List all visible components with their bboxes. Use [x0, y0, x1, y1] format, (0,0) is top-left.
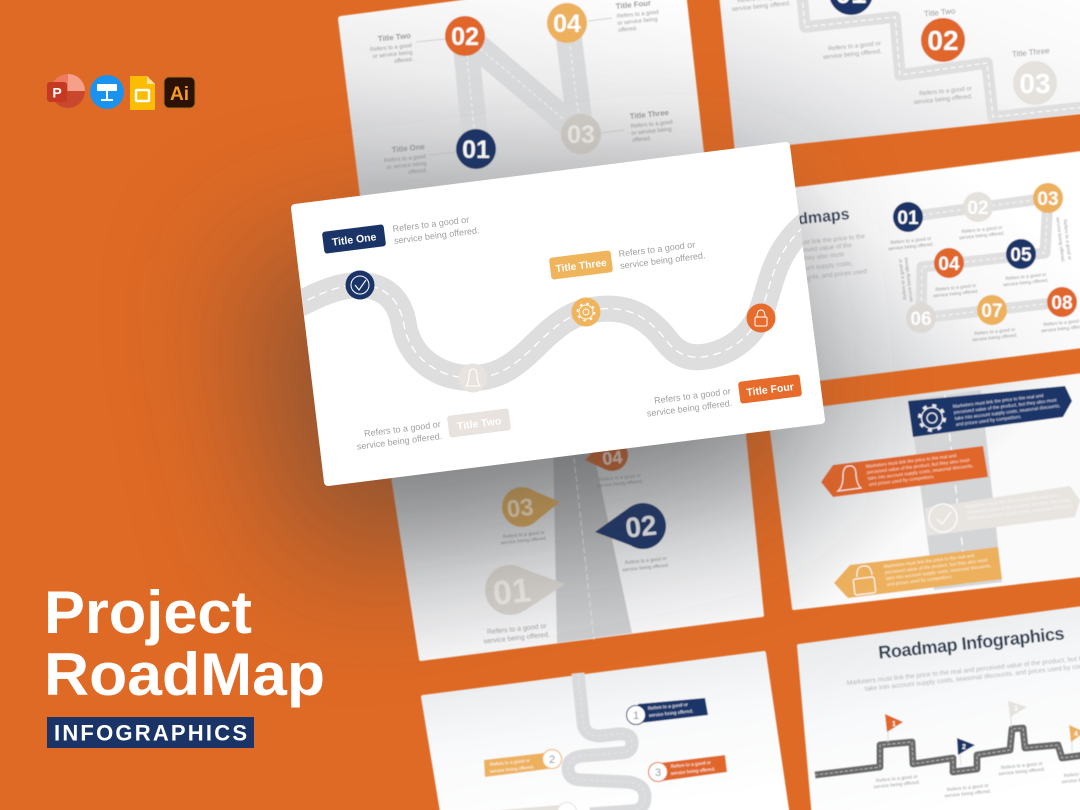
caption 2: service being offered. — [823, 48, 882, 61]
step 08 — [1047, 287, 1077, 317]
step 07: 07 — [981, 301, 1003, 322]
step 01 — [893, 202, 923, 232]
step captions: service being offered. — [1054, 217, 1066, 263]
flag captions: Refers to a good or — [1001, 761, 1043, 771]
paragraph: they also must — [802, 251, 844, 262]
label: Title One: Title One — [391, 142, 426, 154]
badge: Title Four — [738, 374, 802, 404]
road: vertical — [909, 390, 1002, 590]
banner text: take into account supply costs, seasonal discounts, — [886, 563, 992, 581]
banner text: and prices used by competitors. — [869, 474, 935, 487]
slide: staircase roadmap — [719, 0, 1080, 148]
banner: gear — [908, 386, 1072, 437]
icon row: app logos — [47, 74, 195, 110]
label: Title One: offered. — [408, 168, 428, 176]
badge: Title Four: Title Four — [746, 381, 795, 399]
connector lines — [416, 18, 624, 155]
banner text: perceived value of the product, but they also must — [954, 397, 1057, 415]
banner text: Marketers must link the price to the real and — [884, 553, 975, 569]
label: Title Four — [615, 0, 660, 34]
banner text: take into account supply costs, seasonal discounts, — [868, 463, 974, 481]
slide: Roadmap Infographics flags — [799, 607, 1080, 810]
heading: Roadmaps — [767, 206, 851, 232]
marker captions — [500, 473, 669, 573]
icon: Illustrator — [164, 77, 195, 108]
marker 01: 01 — [491, 571, 533, 613]
step 06: 06 — [910, 309, 932, 330]
text: Title Three description — [618, 238, 706, 271]
label: Title One: Refers to a good — [384, 154, 426, 164]
badge: Title Three: Title Three — [555, 258, 608, 275]
slide: vertical road with arrow banners — [770, 374, 1080, 608]
label: Title One — [382, 142, 428, 178]
text: Title One description — [392, 213, 480, 246]
step 02 — [963, 192, 993, 222]
text: Title Four description — [645, 386, 733, 419]
caption 3 — [913, 85, 973, 106]
marker 04: 04 — [601, 447, 623, 469]
badge: Title Two — [447, 408, 511, 438]
flag captions: service being offered. — [873, 780, 920, 790]
title: RoadMap — [44, 641, 325, 708]
label 2: 2 — [549, 754, 555, 766]
banner text — [884, 553, 992, 587]
marker captions: service being offered. — [596, 479, 643, 489]
step 04: 04 — [938, 254, 960, 275]
label: Title Two — [368, 31, 414, 67]
label 1: Refers to a good or — [648, 702, 688, 711]
step 02: 02 — [967, 198, 989, 219]
step 03: 03 — [1019, 68, 1051, 99]
slide: teardrop markers — [392, 425, 762, 659]
step 06 — [906, 303, 936, 333]
flag captions: service being offered. — [944, 789, 991, 799]
paragraph — [789, 233, 868, 285]
caption 3: service being offered. — [914, 93, 973, 106]
slide: Roadmaps eight steps — [767, 152, 1080, 379]
label: Title Three: Title Three — [629, 108, 670, 121]
icon: bell marker — [458, 364, 488, 392]
flag 3: 3 — [1014, 706, 1018, 713]
banner text — [866, 453, 974, 487]
marker captions: service being offered. — [500, 536, 547, 546]
label: Title Two: or service being — [372, 50, 413, 60]
main card shadow — [235, 195, 790, 570]
label: Title Four: or service being — [617, 17, 658, 27]
step 03: 03 — [567, 121, 595, 149]
banner: bell — [821, 446, 988, 497]
label: Title Three: or service being — [631, 127, 672, 137]
icon: gear — [920, 406, 944, 430]
step 02 — [921, 18, 965, 62]
flag 3 — [1008, 701, 1027, 727]
step captions: Refers to a good or — [897, 258, 908, 300]
label 2: service being offered. — [490, 764, 535, 774]
label 1 — [626, 698, 708, 724]
title: Project — [44, 579, 252, 646]
label 1: 1 — [633, 710, 639, 722]
banner text: take into account supply costs, seasonal discounts, — [955, 403, 1061, 421]
marker 02 — [595, 503, 666, 549]
caption 01 — [483, 623, 550, 645]
step 03 — [561, 114, 601, 154]
step 01: 01 — [897, 208, 919, 229]
label 2: Refers to a good or — [490, 758, 530, 767]
text: Title Three description: service being offered. — [620, 250, 706, 271]
step 08: 08 — [1051, 293, 1073, 314]
banner text: perceived value of the product, but they also must — [885, 557, 988, 575]
label 2 — [484, 750, 562, 777]
step captions: Refers to a good or — [974, 327, 1016, 337]
label 3: Refers to a good or — [671, 760, 711, 769]
icon: bell — [838, 466, 861, 491]
badge: Title One: Title One — [331, 231, 377, 249]
text: Title Two description: service being offered. — [356, 431, 443, 452]
banner text: perceived value of the product, but they also must — [867, 457, 970, 475]
text: Title Two description: Refers to a good or — [364, 419, 441, 439]
icon: lock marker — [746, 304, 776, 332]
marker 01 — [485, 565, 565, 615]
text: Title Three description: Refers to a good or — [618, 239, 696, 259]
banner text: Marketers must link the price to the real and — [966, 493, 1057, 509]
flag 1 — [885, 714, 903, 742]
flag captions: Refers to a good or — [876, 774, 918, 784]
label: Title One: or service being — [386, 161, 427, 171]
step 03: 03 — [1037, 189, 1059, 210]
icon: check marker — [346, 270, 374, 300]
label: Title Three: Title Three — [1011, 46, 1051, 59]
caption 3: Refers to a good or — [919, 85, 972, 98]
road: serpentine — [908, 198, 1062, 318]
slide: winding road — [423, 653, 790, 810]
icon: gear marker — [572, 298, 600, 326]
marker 03 — [502, 487, 560, 527]
label: Title Two: offered. — [394, 57, 414, 65]
banner text: perceived value of the product, but they also must — [967, 497, 1070, 515]
step 02 — [445, 16, 485, 56]
step captions: service being offered. — [903, 256, 915, 302]
label: Title Three: Refers to a good — [631, 120, 673, 130]
step captions: Refers to a good or — [935, 283, 977, 293]
banner text: and prices used by competitors. — [956, 414, 1022, 427]
road: staircase — [802, 0, 1080, 117]
flag 4: 4 — [1074, 731, 1078, 738]
marker captions: service being offered. — [622, 563, 669, 573]
caption 01: service being offered. — [483, 632, 550, 645]
badge: Title One — [322, 224, 386, 254]
icon: check — [929, 504, 957, 532]
icon: PowerPoint: P — [52, 84, 62, 100]
label: Title Two: Refers to a good — [370, 43, 412, 53]
label: Title Two: Title Two — [924, 6, 956, 19]
step 01: 01 — [462, 136, 490, 164]
step captions — [888, 217, 1080, 343]
badge: Title Three — [549, 250, 613, 280]
step 01 — [829, 0, 873, 15]
heading: Roadmap Infographics — [877, 623, 1065, 663]
step captions: service being offered. — [959, 231, 1005, 241]
step 02: 02 — [451, 23, 479, 51]
caption 2: Refers to a good or — [828, 40, 881, 53]
flag captions — [873, 761, 1080, 799]
icon: Google Slides — [130, 76, 155, 110]
banner text: Marketers must link the price to the real and — [866, 453, 957, 469]
flag captions: service being offered. — [998, 767, 1045, 777]
step captions: service being offered. — [933, 289, 979, 299]
flag 2 — [957, 738, 975, 765]
slide: N-shaped roadmap — [341, 0, 701, 196]
step 03 — [1033, 183, 1063, 213]
step 02: 02 — [927, 25, 959, 56]
caption 01: Refers to a good or — [487, 623, 548, 636]
text: Title One description: Refers to a good or — [392, 214, 470, 234]
icon: lock — [853, 566, 876, 595]
banner text — [966, 493, 1074, 521]
road: winding — [568, 673, 645, 810]
paragraph: perceived value of the — [789, 242, 853, 256]
panel: main road card — [295, 146, 821, 482]
step captions: Refers to a good or — [961, 225, 1003, 235]
label: Title Four: offered. — [618, 26, 638, 34]
banner: lock — [834, 547, 1002, 598]
text: Title Two description — [355, 419, 443, 452]
flag 2: 2 — [962, 744, 966, 751]
banner: check — [925, 486, 1080, 536]
road: winding main — [296, 220, 812, 378]
marker 02: 02 — [624, 510, 658, 544]
road: N shape — [465, 23, 581, 149]
title — [44, 579, 325, 708]
road: stepped — [815, 728, 1080, 775]
label 3: service being offered. — [671, 766, 716, 776]
icon: Illustrator: Ai — [170, 84, 189, 105]
icon: Keynote — [90, 75, 124, 109]
flag 4 — [1069, 725, 1080, 752]
banner text — [953, 393, 1061, 427]
banner text: Marketers must link the price to the real and — [953, 393, 1044, 409]
badge: Title Two: Title Two — [456, 415, 502, 433]
step captions: service being offered. — [888, 242, 934, 252]
flag captions: Refers to a good or — [947, 783, 989, 793]
text: Title Four description: Refers to a good or — [654, 386, 731, 406]
caption 1: service being offered. — [732, 0, 791, 13]
icon: PowerPoint — [47, 74, 85, 108]
banner text: take into account supply costs, seasonal discounts, — [968, 503, 1074, 521]
step captions: Refers to a good or — [1005, 272, 1047, 282]
label: Title Four: Refers to a good — [617, 10, 659, 20]
road: straight — [553, 436, 632, 643]
step 04: 04 — [553, 10, 581, 38]
step 04 — [934, 248, 964, 278]
paragraph: rs. — [804, 277, 812, 285]
paragraph: account supply costs, — [792, 260, 853, 273]
label: Title Three: offered. — [632, 136, 652, 144]
text: Title One description: service being offered. — [394, 225, 480, 246]
banner text: and prices used by competitors. — [887, 574, 953, 587]
text: Title Four description: service being offered. — [646, 398, 733, 419]
paragraph: must link the price to the — [796, 233, 866, 247]
marker 04 — [585, 439, 628, 471]
label: Title Two: Title Two — [377, 31, 411, 43]
label 3: 3 — [655, 767, 661, 779]
step captions: service being offered. — [972, 333, 1018, 343]
subtitle badge: INFOGRAPHICS — [54, 720, 247, 746]
label: Title Three — [629, 108, 674, 144]
step 04 — [547, 3, 587, 43]
step 03 — [1013, 61, 1057, 105]
step captions: service being offered. — [1003, 278, 1049, 288]
step captions: Refers to a good or — [890, 236, 932, 246]
step 05 — [1006, 239, 1036, 269]
step 01 — [456, 129, 496, 169]
label 3 — [648, 755, 727, 782]
step 05: 05 — [1010, 245, 1032, 266]
marker 03: 03 — [506, 494, 535, 523]
caption 2 — [822, 40, 882, 61]
step 07 — [977, 295, 1007, 325]
label 1: service being offered. — [649, 708, 694, 718]
marker captions: Refers to a good or — [503, 530, 545, 540]
step captions: Refers to a good or — [1062, 219, 1073, 261]
marker captions: Refers to a good or — [599, 473, 641, 483]
marker captions: Refers to a good or — [625, 556, 667, 566]
flag 1: 1 — [892, 721, 896, 728]
label 4 — [490, 802, 576, 810]
paragraph: discounts, and prices used — [791, 268, 868, 283]
